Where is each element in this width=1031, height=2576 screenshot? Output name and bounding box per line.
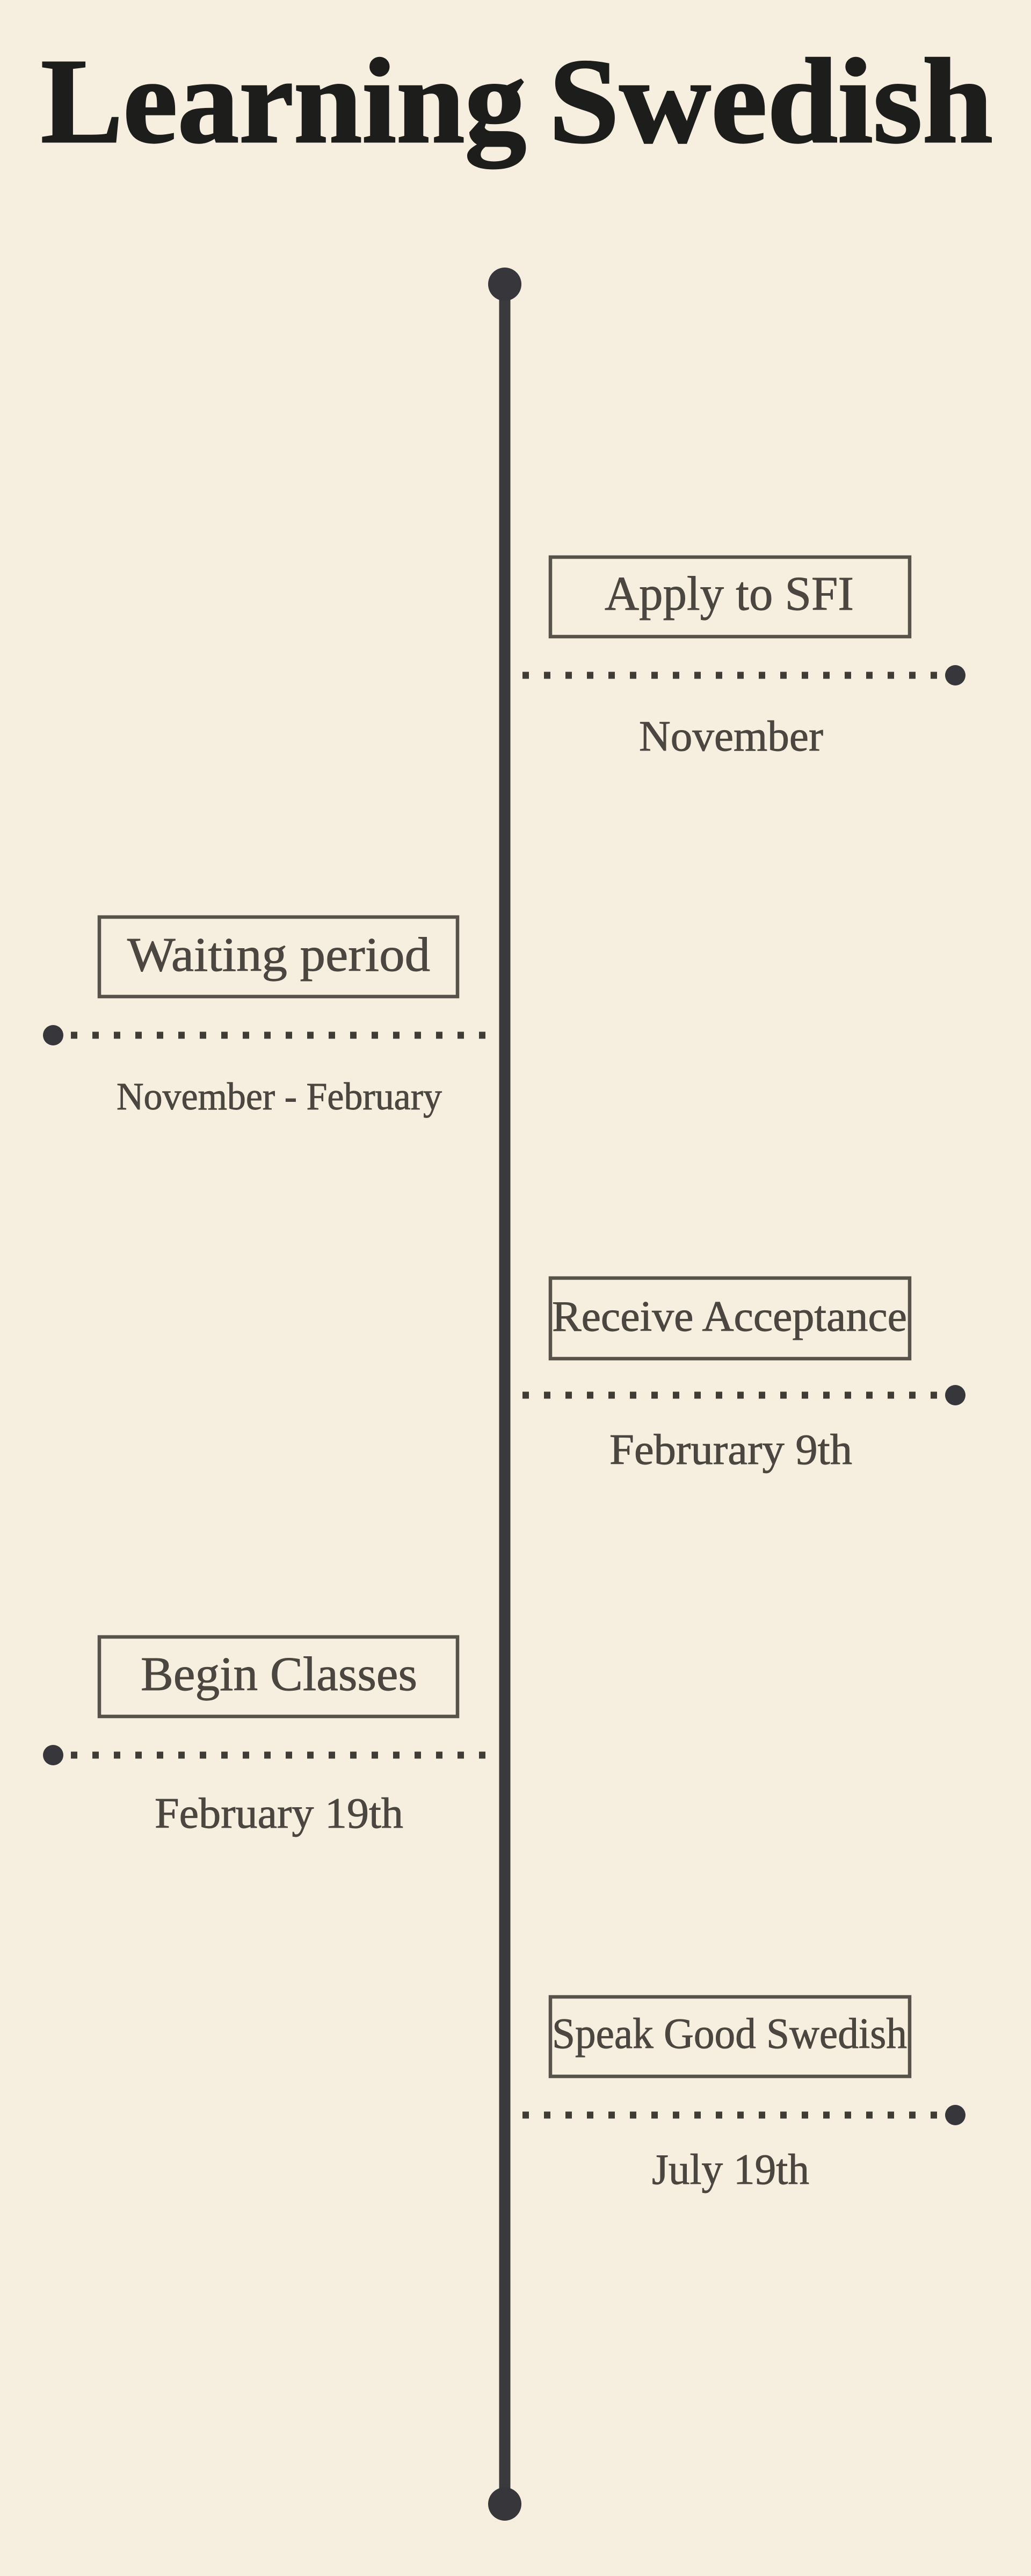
label box: Speak Good Swedish (552, 2010, 907, 2058)
date: Februrary 9th (609, 1426, 852, 1474)
date: February 19th (155, 1790, 403, 1837)
label box: Apply to SFI (605, 567, 854, 620)
timeline start dot (488, 268, 521, 301)
title: Learning (41, 34, 526, 169)
milestone: Apply to SFI (522, 557, 965, 760)
label box: Waiting period (127, 928, 430, 982)
title: Swedish (549, 34, 993, 168)
milestone: Speak Good Swedish (522, 1997, 965, 2193)
dotted connector (43, 1025, 487, 1045)
label box (550, 1997, 910, 2076)
dotted connector (43, 1745, 487, 1765)
label box (550, 557, 910, 637)
date: November (639, 713, 823, 760)
milestone: Receive Acceptance (522, 1278, 965, 1474)
label box: Receive Acceptance (552, 1293, 907, 1340)
label box: Begin Classes (141, 1648, 417, 1701)
dotted connector (522, 1385, 965, 1405)
date: November - February (117, 1075, 442, 1118)
timeline axis (488, 268, 521, 2521)
milestone: Waiting period (43, 917, 487, 1118)
date: July 19th (652, 2146, 809, 2193)
dotted connector (522, 2105, 965, 2125)
label box (550, 1278, 910, 1359)
label box (99, 1637, 458, 1716)
title (41, 34, 993, 169)
label box (99, 917, 458, 997)
timeline end dot (488, 2487, 521, 2521)
dotted connector (522, 665, 965, 686)
milestone: Begin Classes (43, 1637, 487, 1837)
